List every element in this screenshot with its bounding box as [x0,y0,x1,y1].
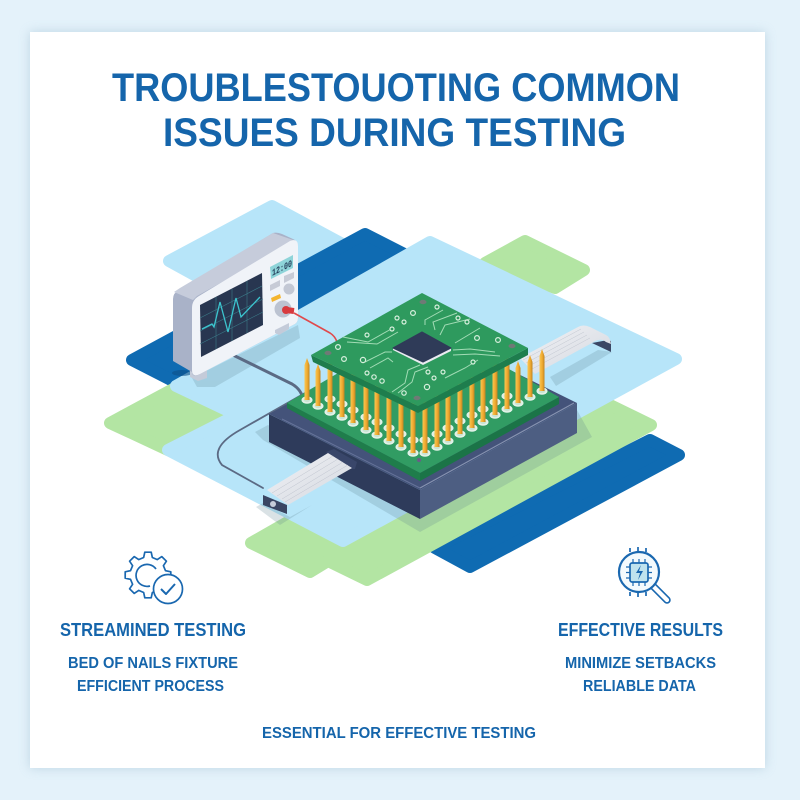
text: right details: MINIMIZE SETBACKS [565,655,716,672]
screen [200,273,263,357]
ribbon cable left [263,449,357,514]
monitor feet [190,370,207,381]
title: ISSUES DURING TESTING [163,111,626,155]
knob [274,300,292,318]
isometric background layers [110,206,679,580]
buttons [270,272,294,302]
oscilloscope [172,233,337,381]
heading: streamined testing: STREAMINED TESTING [60,620,246,640]
text: right details [565,655,716,695]
title: TROUBLESTOUOTING COMMON [112,66,680,110]
text: left details: EFFICIENT PROCESS [77,678,224,695]
PCB traces [343,310,500,393]
PCB vias [336,305,500,395]
rear foot [275,323,289,335]
LCD display: 12:00 [272,259,292,280]
footer text: ESSENTIAL FOR EFFECTIVE TESTING [262,725,536,742]
icon: gear with check [125,552,182,604]
text: left details: BED OF NAILS FIXTURE [68,655,238,672]
test fixture base [269,328,577,519]
ribbon cable right [520,326,611,374]
mounting holes [324,300,516,400]
heading: effective results: EFFECTIVE RESULTS [558,620,723,640]
monitor shadow foot [172,370,192,376]
LCD display [270,255,293,280]
ground shadows [192,325,612,532]
monitor body [173,233,298,376]
monitor top [174,233,296,300]
lower PCB [287,322,559,481]
test pins front row [301,349,548,457]
upper PCB [311,293,528,413]
title [112,66,680,155]
test pins back row [324,354,513,444]
cables [218,355,305,488]
waveform [202,297,260,332]
red probe [282,306,337,342]
text: left details [68,655,238,695]
monitor front [192,240,298,375]
text: right details: RELIABLE DATA [583,678,696,695]
screen grid [200,281,263,349]
icon: magnifier with chip [619,547,667,600]
microchip [393,332,451,365]
ribbon connector [263,495,287,514]
